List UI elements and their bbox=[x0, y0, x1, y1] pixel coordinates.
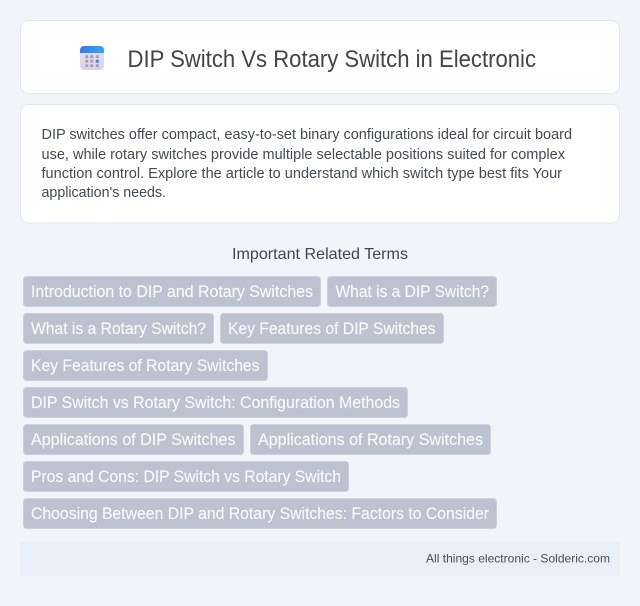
chip: key features of DIP bbox=[220, 314, 444, 344]
chip: choosing between: Choosing Between DIP and Rotary Switches: Factors to Consider bbox=[31, 505, 489, 523]
chip: applications of DIP: Applications of DIP Switches bbox=[31, 431, 236, 449]
text block: summary: application's needs. bbox=[42, 185, 166, 201]
chip: what is a DIP switch: What is a DIP Switch? bbox=[336, 283, 489, 301]
icon: calendar grid bbox=[80, 46, 104, 70]
chip: applications of rotary bbox=[250, 424, 490, 454]
footer text: All things electronic - Solderic.com bbox=[426, 552, 610, 566]
text block: summary: DIP switches offer compact, easy-to-set binary configurations ideal for circuit board bbox=[42, 127, 572, 143]
chip: key features of rotary: Key Features of Rotary Switches bbox=[31, 357, 260, 375]
text block: summary bbox=[42, 127, 572, 201]
chip: applications of rotary: Applications of Rotary Switches bbox=[258, 431, 483, 449]
chip: applications of DIP bbox=[24, 424, 244, 454]
chip: introduction: Introduction to DIP and Rotary Switches bbox=[31, 283, 313, 301]
chip: what is a rotary switch: What is a Rotary Switch? bbox=[31, 320, 206, 338]
chip: key features of DIP: Key Features of DIP Switches bbox=[228, 320, 436, 338]
chip: what is a DIP switch bbox=[328, 276, 496, 306]
heading: important related terms: Important Related Terms bbox=[232, 246, 408, 263]
chip: pros and cons: Pros and Cons: DIP Switch vs Rotary Switch bbox=[31, 468, 341, 486]
chip: configuration methods bbox=[24, 388, 408, 418]
panel: title card bbox=[20, 20, 620, 94]
chip: pros and cons bbox=[24, 462, 348, 492]
panel: summary card bbox=[20, 104, 620, 223]
chip: configuration methods: DIP Switch vs Rotary Switch: Configuration Methods bbox=[31, 394, 400, 412]
footer bar bbox=[20, 542, 620, 576]
text block: summary: function control. Explore the article to understand which switch type best fits Your bbox=[42, 166, 562, 182]
text block: summary: use, while rotary switches provide multiple selectable positions suited for complex bbox=[42, 147, 565, 163]
title: DIP Switch Vs Rotary Switch in Electronic bbox=[128, 46, 536, 73]
chip: choosing between bbox=[24, 498, 496, 528]
chip: what is a rotary switch bbox=[24, 314, 214, 344]
chip: key features of rotary bbox=[24, 350, 268, 380]
chip: introduction bbox=[24, 276, 320, 306]
panel: related term chips bbox=[24, 276, 496, 528]
